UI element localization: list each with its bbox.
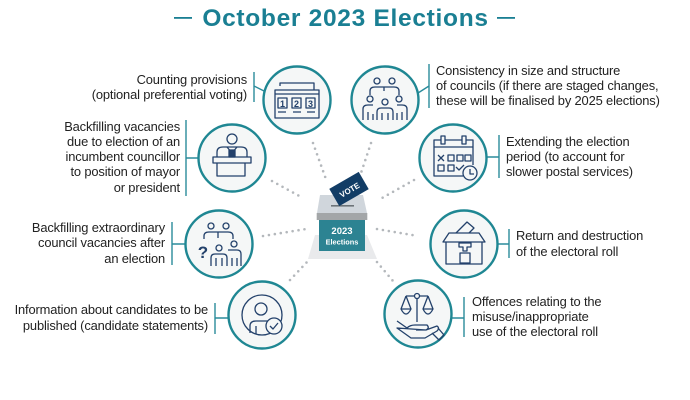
- item: information about candidates: published (candidate statements): [23, 318, 208, 333]
- item: offences: Offences relating to the: [472, 294, 601, 309]
- item: counting provisions: (optional preferential voting): [92, 87, 247, 102]
- icon: people with question mark: ?: [198, 243, 208, 262]
- icon: candidate with tick: [242, 295, 282, 335]
- icon: numbered ballot: 1: [280, 99, 285, 109]
- item: information about candidates: Information about candidates to be: [15, 302, 208, 317]
- item: counting provisions: Counting provisions: [137, 72, 247, 87]
- item: backfilling incumbent vacancies: [64, 119, 266, 196]
- item: backfilling incumbent vacancies: or president: [114, 180, 181, 195]
- item: backfilling incumbent vacancies: due to election of an: [67, 134, 180, 149]
- dotted connectors: [263, 143, 418, 281]
- item: consistency of councils: these will be finalised by 2025 elections): [436, 93, 660, 108]
- ballot paper: VOTE: [338, 181, 362, 200]
- item: extending the election period: Extending the election: [506, 134, 630, 149]
- item: offences: [384, 280, 601, 348]
- title: October 2023 Elections: [202, 5, 489, 32]
- icon: numbered ballot: [275, 83, 319, 118]
- icon: numbered ballot: 2: [294, 99, 299, 109]
- item: consistency of councils: Consistency in size and structure: [436, 63, 620, 78]
- ballot box: [308, 172, 377, 259]
- item: offences: use of the electoral roll: [472, 324, 598, 339]
- item: consistency of councils: [352, 63, 660, 134]
- icon: numbered ballot: 3: [308, 99, 313, 109]
- item: backfilling incumbent vacancies: incumbent councillor: [65, 149, 181, 164]
- icon: locked ballot box: [443, 222, 485, 264]
- icon: people with question mark: [198, 223, 241, 266]
- item: backfilling extraordinary vacancies: an election: [104, 251, 165, 266]
- item: information about candidates: [15, 282, 296, 348]
- icon: group of people: [363, 78, 407, 120]
- item: offences: misuse/inappropriate: [472, 309, 589, 324]
- item: extending the election period: slower postal services): [506, 164, 633, 179]
- item: return and destruction of roll: Return and destruction: [516, 228, 643, 243]
- icon: person at podium: [213, 134, 251, 176]
- item: consistency of councils: of councils (if there are staged changes,: [436, 78, 658, 93]
- icon: scales on a hand: [397, 294, 444, 340]
- item: extending the election period: period (to account for: [506, 149, 625, 164]
- item: backfilling extraordinary vacancies: Backfilling extraordinary: [32, 220, 166, 235]
- ballot box: 2023: [331, 226, 353, 237]
- item: return and destruction of roll: [430, 210, 643, 278]
- item: extending the election period: [420, 124, 633, 192]
- item: backfilling incumbent vacancies: Backfilling vacancies: [64, 119, 180, 134]
- ballot box: Elections: [326, 238, 358, 246]
- item: backfilling extraordinary vacancies: council vacancies after: [38, 235, 166, 250]
- item: backfilling incumbent vacancies: to position of mayor: [70, 164, 181, 179]
- icon: calendar with clock: [434, 136, 477, 180]
- item: backfilling extraordinary vacancies: [32, 210, 252, 278]
- item: counting provisions: [92, 66, 330, 134]
- item: return and destruction of roll: of the electoral roll: [516, 244, 618, 259]
